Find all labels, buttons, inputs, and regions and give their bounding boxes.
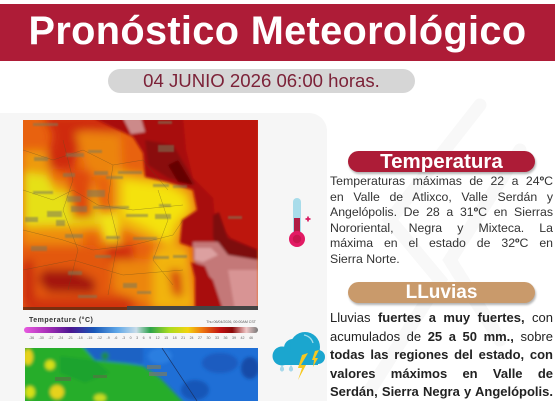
legend bar bbox=[24, 327, 258, 333]
map legend: temperature bbox=[24, 316, 258, 340]
map: temperature forecast bbox=[23, 120, 258, 310]
legend date: Thu 06/04/2026, 00:00AM CST bbox=[206, 320, 257, 324]
panel: maps bbox=[0, 113, 327, 401]
text: temperature forecast: Temperaturas máximas de 22 a 24ºC bbox=[330, 174, 553, 188]
text: temperature forecast: Angelópolis. De 28 a 31ºC en Sierras bbox=[330, 205, 553, 219]
text: rainfall forecast: Lluvias fuertes a muy fuertes, con bbox=[330, 310, 553, 325]
heading: Lluvias bbox=[348, 282, 535, 303]
legend scale: -36 -30 -27 -24 -21 -18 -15 -12 -9 -6 -3 0 3 6 9 12 15 18 21 24 27 30 33 36 39 42 46 bbox=[29, 336, 253, 340]
text: rainfall forecast: Serdán, Sierra Negra y Angelópolis. bbox=[330, 384, 553, 399]
date pill: 04 JUNIO 2026 06:00 horas. bbox=[143, 70, 380, 91]
text: temperature forecast: máxima en el estado de 32ºC en bbox=[330, 236, 553, 250]
heading: Temperatura: Temperatura bbox=[380, 150, 503, 173]
title banner: Pronóstico Meteorológico bbox=[29, 9, 526, 53]
heading: Temperatura bbox=[348, 151, 535, 172]
text: rainfall forecast: todas las regiones del estado, con bbox=[330, 347, 553, 362]
text: temperature forecast: Nororiental, Negra y Mixteca. La bbox=[330, 221, 553, 235]
map: rainfall forecast bbox=[25, 348, 258, 401]
title banner bbox=[0, 4, 555, 61]
icon: thermometer bbox=[289, 198, 310, 247]
text: rainfall forecast: valores máximos en Valle de bbox=[330, 366, 553, 380]
background watermark bbox=[330, 90, 555, 401]
text: rainfall forecast bbox=[330, 310, 553, 399]
text: temperature forecast bbox=[330, 174, 553, 266]
text: rainfall forecast: acumulados de 25 a 50 mm., sobre bbox=[330, 328, 553, 344]
legend title: Temperature (°C) bbox=[29, 316, 93, 324]
text: temperature forecast: en Valle de Atlixco, Valle Serdán y bbox=[330, 190, 553, 204]
heading: Lluvias: LLuvias bbox=[406, 282, 477, 303]
text: temperature forecast: Sierra Norte. bbox=[330, 252, 400, 266]
icon: storm cloud bbox=[272, 332, 325, 380]
date pill bbox=[108, 69, 415, 93]
